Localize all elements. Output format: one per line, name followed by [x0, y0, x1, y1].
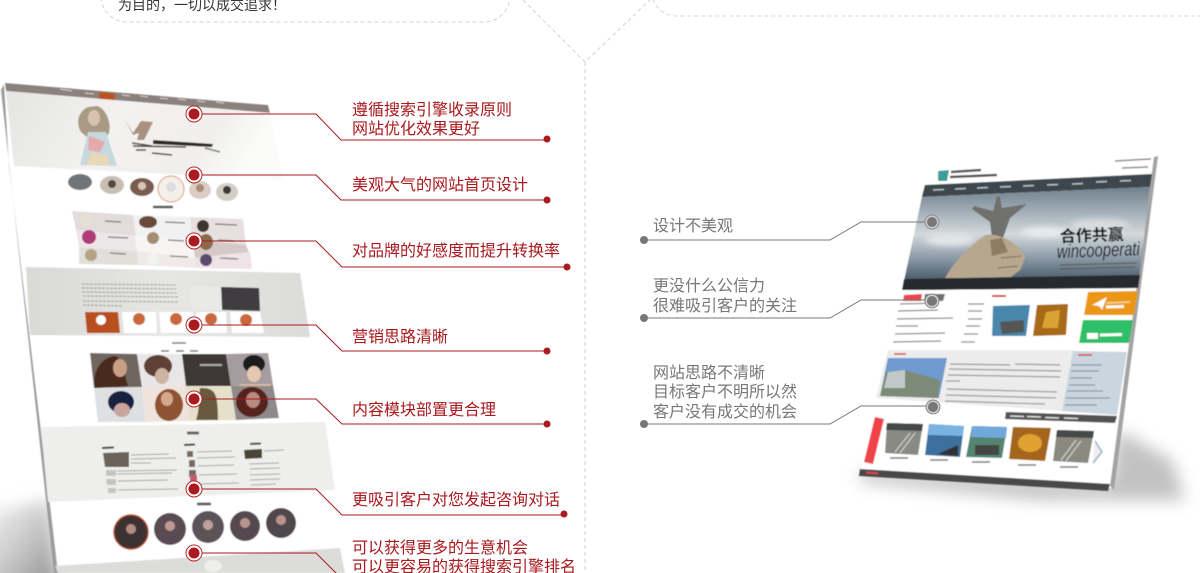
- news columns: [102, 433, 284, 493]
- news tabs: [903, 294, 945, 301]
- left annotation 1: [186, 100, 550, 142]
- marketing copy: [82, 284, 178, 306]
- about heading: [894, 353, 906, 355]
- shadow of right mockup: [860, 430, 1185, 500]
- marketing placeholder: [190, 287, 222, 310]
- green button: [1079, 320, 1133, 343]
- feature tile gallery: [72, 211, 252, 269]
- contact lines: [1065, 365, 1110, 405]
- fist and statue: [945, 196, 1027, 278]
- about section: [876, 350, 1075, 411]
- left annotation 4: 营销思路清晰: [352, 328, 448, 346]
- right edge: [1110, 156, 1158, 490]
- footer: [859, 469, 1110, 491]
- right annotation 3: 客户没有成交的机会: [653, 403, 797, 421]
- about photo: [880, 358, 947, 398]
- nav bar: [5, 83, 270, 113]
- right annotation 3: 目标客户不明所以然: [653, 383, 797, 401]
- right annotation 1: 设计不美观: [653, 217, 733, 235]
- blue contact panel: [1062, 351, 1127, 415]
- hero caption: [1060, 263, 1137, 269]
- thumbnail captions: [890, 458, 1078, 467]
- left annotation 6: [186, 481, 568, 518]
- right annotation 2: 很难吸引客户的关注: [653, 297, 797, 315]
- center divider: [523, 0, 650, 573]
- left annotation 6: 更吸引客户对您发起咨询对话: [352, 491, 560, 509]
- dark tag: [1005, 412, 1117, 423]
- right annotation 3: [640, 364, 940, 428]
- page base: [4, 84, 345, 573]
- left annotation 7: 可以获得更多的生意机会: [352, 538, 528, 557]
- left annotation 3: 对品牌的好感度而提升转换率: [352, 242, 560, 260]
- hero slogan: 合作共赢: [1059, 225, 1124, 246]
- hero slogan english: wincooperati: [1056, 239, 1141, 263]
- logo: [938, 170, 997, 181]
- product thumbnails: [992, 304, 1068, 336]
- portfolio heading: [161, 343, 198, 351]
- nav labels: [933, 180, 1131, 190]
- gray marketing band: [26, 267, 310, 337]
- news list: [893, 303, 984, 342]
- orange button: [1084, 291, 1138, 315]
- right annotation 1: [640, 215, 939, 244]
- left annotation 5: [186, 391, 550, 428]
- about copy: [945, 364, 1061, 404]
- product heading: [992, 295, 1006, 297]
- left annotation 2: [186, 167, 550, 204]
- dashed callout box right: [652, 0, 1200, 16]
- marketing cards: [85, 312, 264, 333]
- left annotation 1: 网站优化效果更好: [352, 120, 480, 138]
- gray news band: [41, 422, 335, 502]
- left annotation 4: [186, 317, 550, 354]
- marketing image: [221, 287, 260, 311]
- portfolio photo grid: [90, 353, 279, 422]
- dashed callout box left: [101, 0, 510, 22]
- hotline: [1115, 159, 1151, 168]
- page base: [860, 157, 1154, 488]
- left edge: [1, 84, 58, 573]
- hero dark strip: [902, 275, 1140, 290]
- left annotation 2: 美观大气的网站首页设计: [352, 176, 528, 194]
- contact heading: [1078, 354, 1092, 356]
- nav bar: [922, 174, 1152, 197]
- left annotation 3: [186, 233, 570, 270]
- thumbnail arrow: [1093, 441, 1102, 463]
- category circles: [68, 174, 238, 202]
- right annotation 2: [640, 277, 939, 322]
- right annotation 2: 更没什么公信力: [653, 277, 765, 295]
- red vertical tag: [864, 417, 884, 464]
- left website mockup: [1, 83, 345, 573]
- section heading: [153, 206, 173, 208]
- hero title: [125, 120, 220, 155]
- thumbnail strip: [885, 423, 1094, 463]
- left annotation 7: [186, 538, 576, 573]
- hero model: [78, 106, 117, 166]
- left annotation 5: 内容模块部置更合理: [352, 401, 496, 419]
- right website mockup: [859, 156, 1158, 491]
- footer accent: [866, 472, 878, 474]
- hero banner: [6, 91, 283, 180]
- team section heading: [197, 502, 211, 506]
- hero banner: [902, 187, 1150, 290]
- right annotation 3: 网站思路不清晰: [653, 364, 765, 382]
- left annotation 1: 遵循搜索引擎收录原则: [352, 100, 512, 119]
- nav highlight: [99, 92, 115, 100]
- footer band: [55, 548, 345, 573]
- clouds: [925, 219, 1130, 246]
- footer badge: [204, 560, 222, 572]
- nav labels: [60, 89, 224, 103]
- shadow of left mockup: [0, 500, 60, 573]
- team portraits: [114, 508, 296, 549]
